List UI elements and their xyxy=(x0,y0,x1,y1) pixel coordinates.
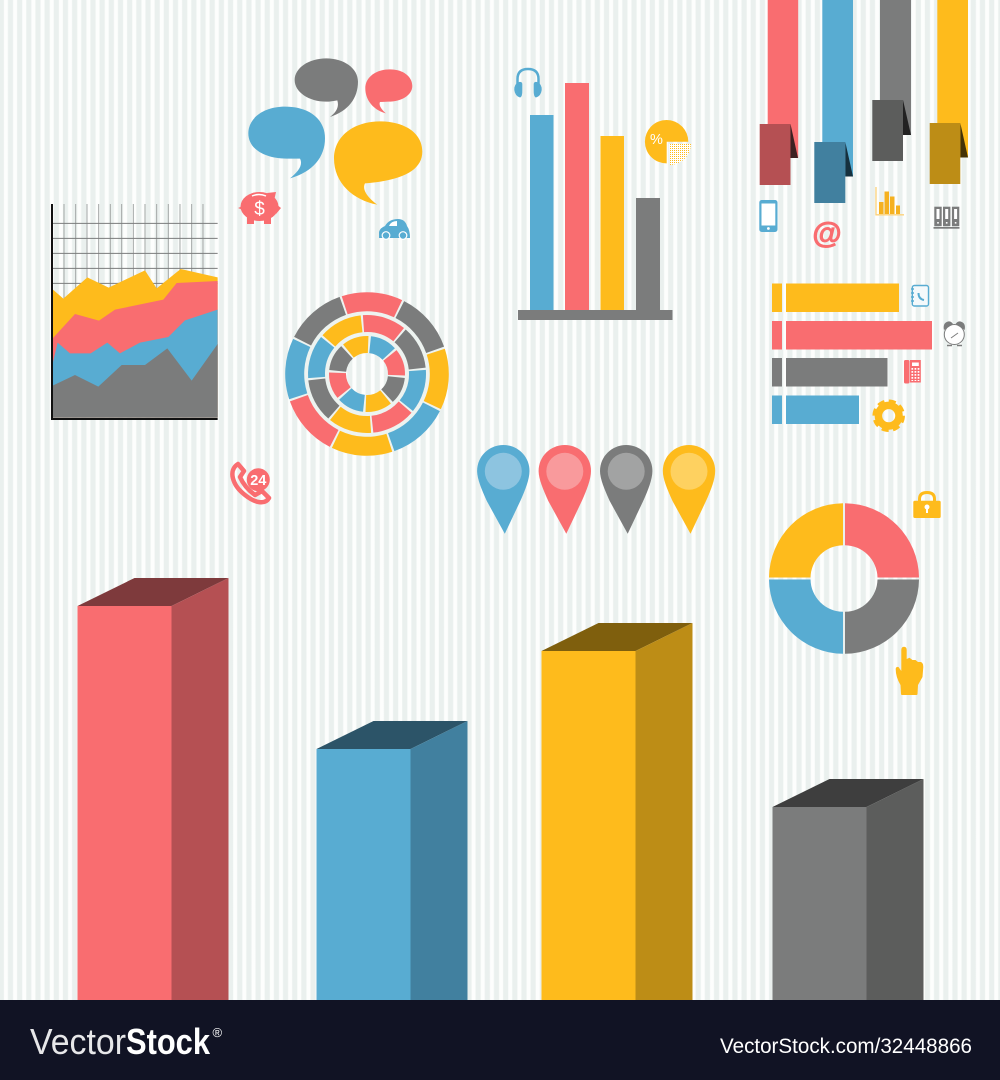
icon: percent pie xyxy=(645,120,691,165)
column chart xyxy=(518,83,672,320)
icon: piggy bank xyxy=(238,192,281,224)
footer url: VectorStock.com/32448866 xyxy=(720,1035,972,1058)
icon: smartphone xyxy=(759,200,778,232)
speech bubbles xyxy=(248,58,422,205)
outer ring xyxy=(270,277,464,471)
footer logo: ® xyxy=(212,1025,222,1040)
hanging ribbons xyxy=(760,0,968,203)
icon: at sign: @ xyxy=(812,217,842,250)
icon: binders xyxy=(934,207,960,229)
icon: 24 hour phone: 24 xyxy=(250,473,266,489)
icon: small bar chart xyxy=(876,187,904,215)
icon: piggy bank: $ xyxy=(254,199,265,220)
icon: gear xyxy=(874,401,903,430)
icon: pointing hand xyxy=(896,647,923,695)
middle ring xyxy=(296,303,438,445)
footer logo xyxy=(30,1021,222,1062)
icon: 24 hour phone xyxy=(232,464,270,502)
footer band xyxy=(0,1000,1000,1080)
ribbon: yellow xyxy=(930,0,968,184)
footer logo: Stock xyxy=(126,1021,211,1062)
horizontal bars xyxy=(772,284,932,424)
3D bar: gray xyxy=(772,779,924,1000)
icon: percent pie: % xyxy=(650,132,663,148)
3D bar: yellow xyxy=(542,623,692,1000)
pin: yellow xyxy=(663,445,715,534)
map pins xyxy=(477,445,715,534)
icon: headphones xyxy=(514,69,542,98)
ribbon: gray xyxy=(872,0,911,161)
icon: address book xyxy=(911,286,928,306)
icon: padlock xyxy=(913,492,941,518)
footer logo: Vector xyxy=(30,1021,126,1062)
donut chart xyxy=(769,503,919,654)
pin: red xyxy=(539,445,591,534)
icon: car xyxy=(379,219,410,239)
3D bar: blue xyxy=(316,721,468,1000)
icon: alarm clock xyxy=(944,321,965,346)
icon: desk telephone xyxy=(904,360,921,384)
pin: gray xyxy=(600,445,652,534)
3D bar: red xyxy=(78,578,228,1000)
inner ring xyxy=(326,333,408,415)
ring chart xyxy=(270,277,464,471)
area chart xyxy=(52,204,218,419)
pin: blue xyxy=(477,445,530,534)
ribbon: red xyxy=(760,0,798,185)
ribbon: blue xyxy=(814,0,853,203)
